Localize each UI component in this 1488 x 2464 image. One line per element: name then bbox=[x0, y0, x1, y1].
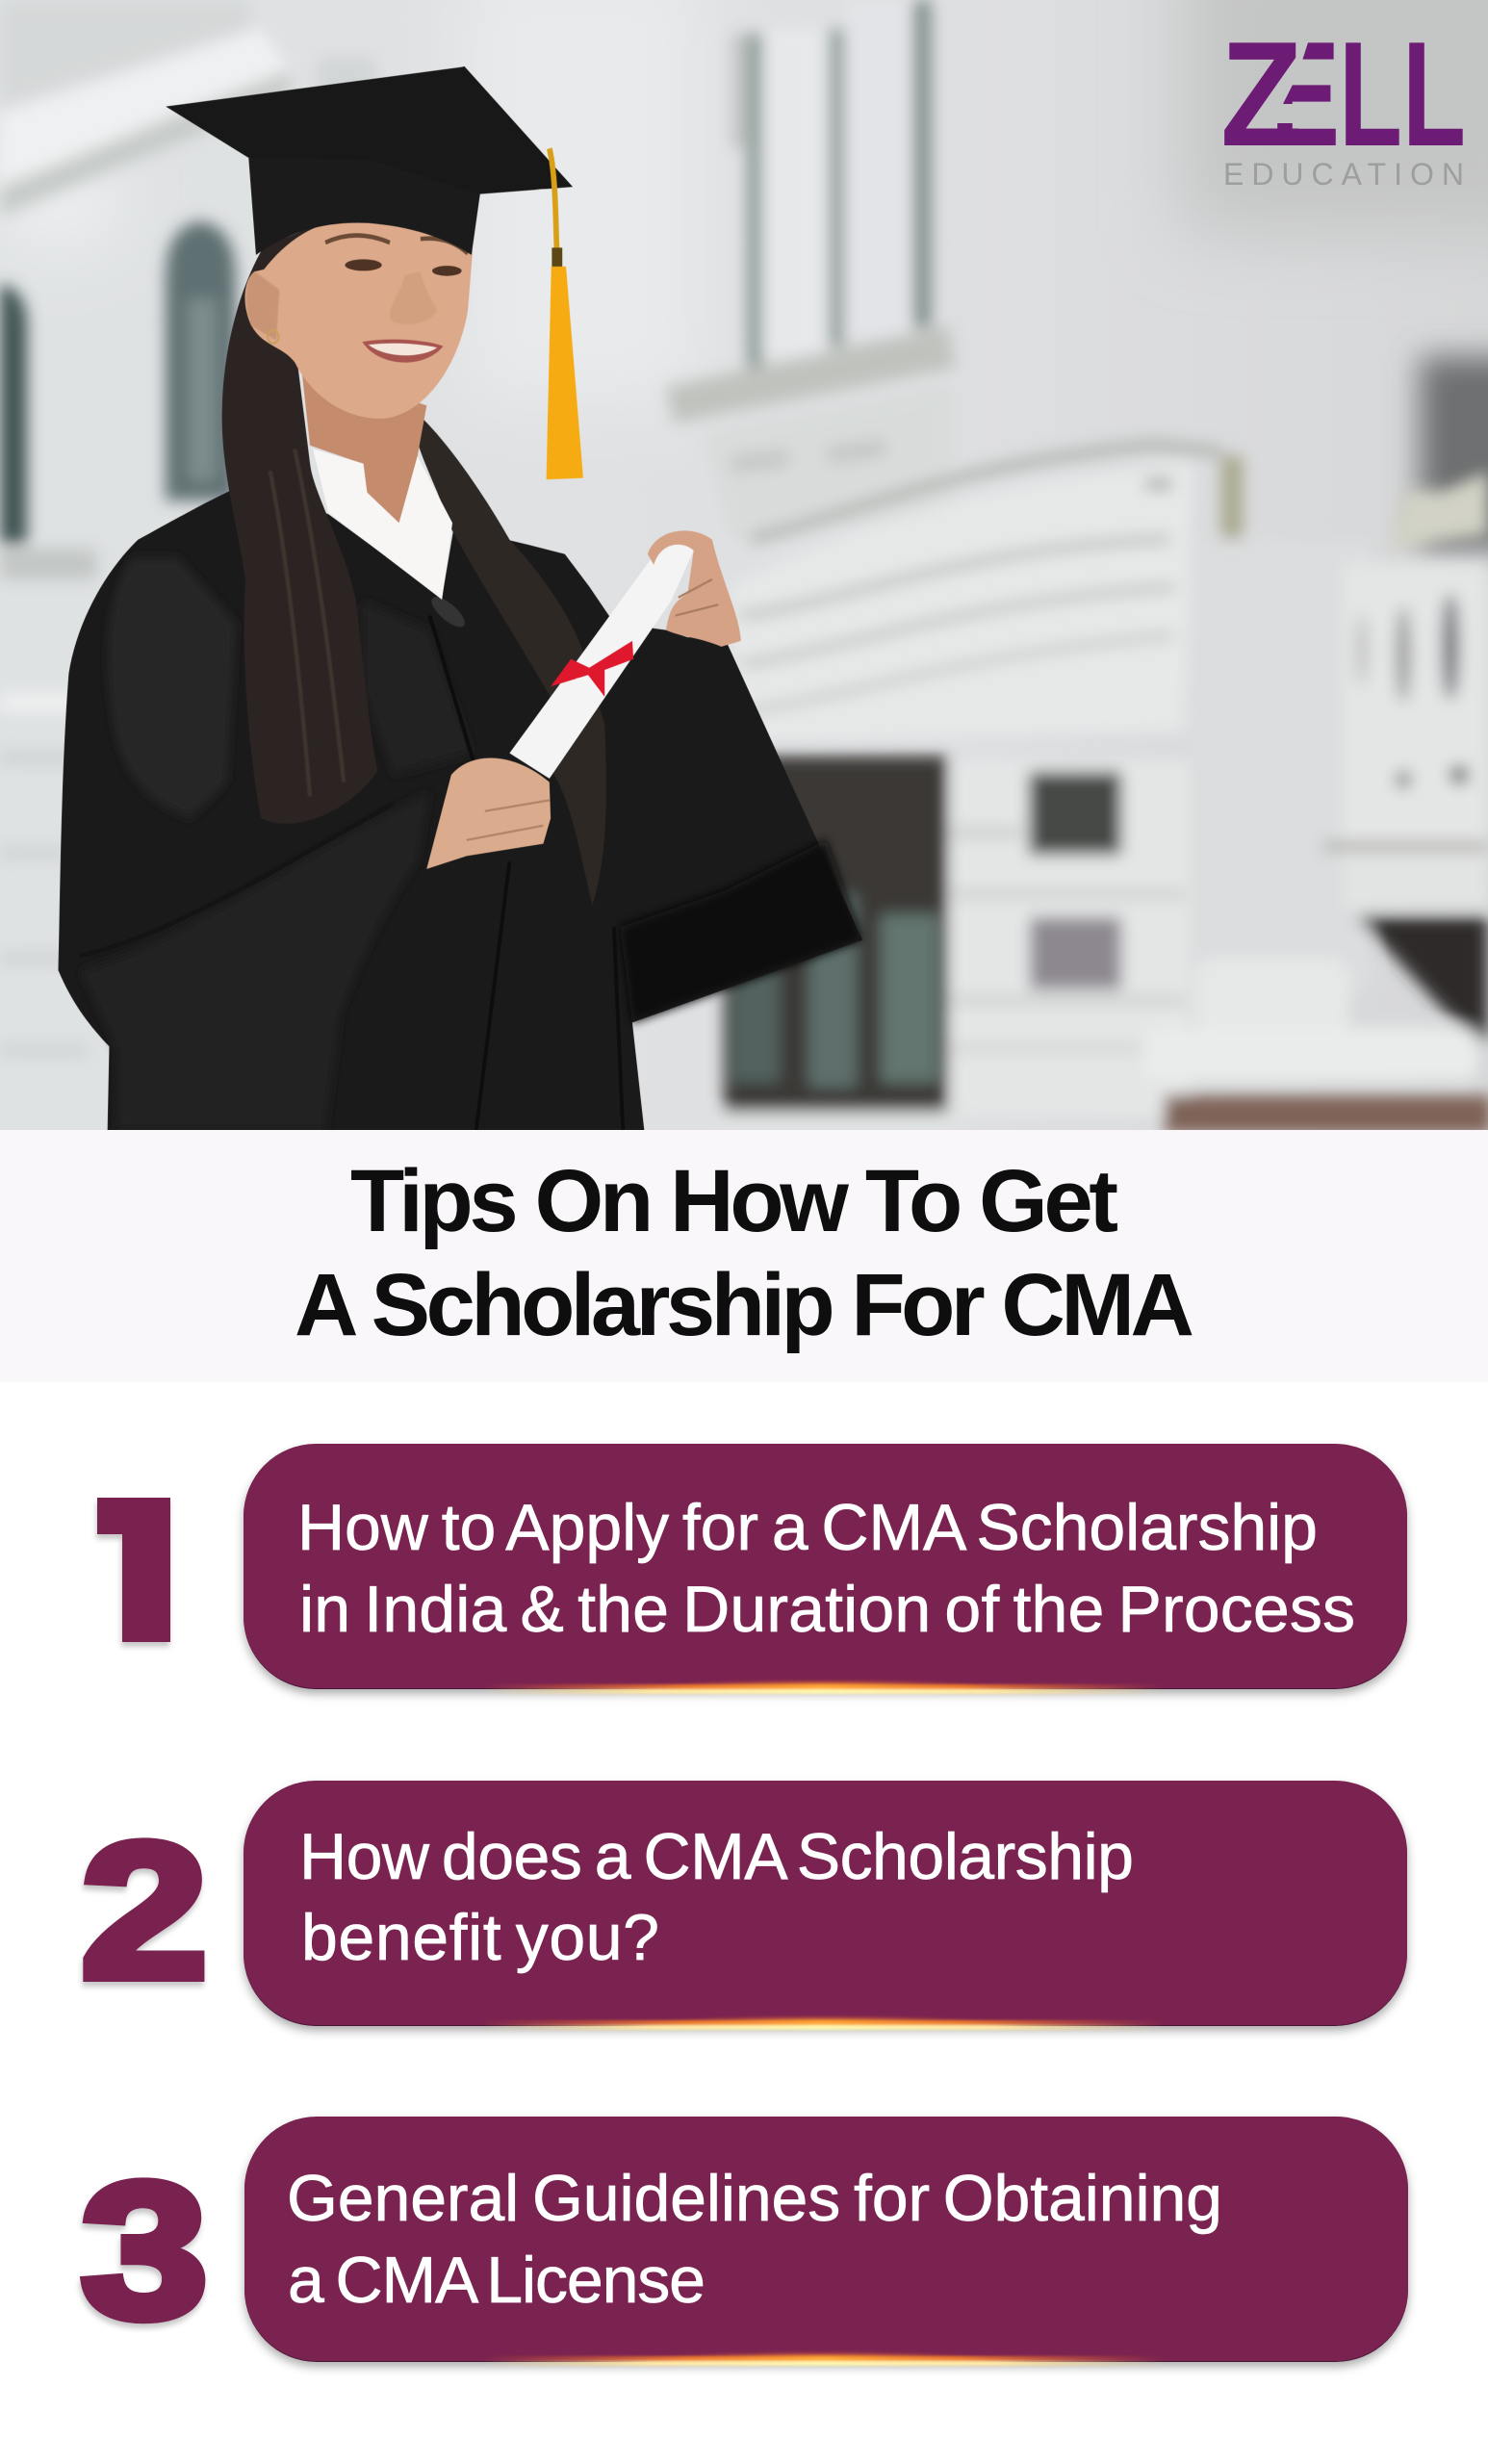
panel: step 1 bbox=[244, 1444, 1407, 1694]
panel: step 3 bbox=[244, 2117, 1408, 2366]
gown bbox=[59, 484, 862, 1134]
glow bbox=[481, 1680, 1165, 1694]
logo wordmark: L bbox=[1339, 11, 1402, 177]
large dark window bbox=[724, 756, 947, 1116]
wavy cornices bbox=[731, 462, 1193, 741]
balcony bbox=[1391, 472, 1488, 549]
lower hand bbox=[426, 757, 551, 869]
diploma scroll bbox=[509, 540, 694, 779]
mortarboard cap bbox=[166, 66, 573, 255]
step 3 text bbox=[287, 2162, 1222, 2317]
logo: Zell Education bbox=[1220, 11, 1466, 192]
white collar bbox=[313, 449, 452, 600]
title heading: Tips On How To Get bbox=[350, 1152, 1118, 1250]
dark recess right bbox=[1420, 356, 1488, 549]
glow bbox=[481, 2351, 1165, 2366]
logo wordmark: Z bbox=[1220, 11, 1302, 177]
left hair bbox=[222, 224, 377, 824]
upper windows bbox=[765, 29, 823, 356]
step 3 text: a CMA License bbox=[288, 2244, 706, 2317]
glow bbox=[481, 2015, 1165, 2030]
arched windows bbox=[166, 221, 236, 500]
upper hand bbox=[648, 530, 741, 647]
small dark windows bbox=[1029, 772, 1121, 855]
logo wordmark bbox=[1220, 11, 1466, 177]
title band bbox=[0, 1130, 1488, 1382]
number 3: 3 bbox=[81, 2143, 208, 2358]
number 1: 1 bbox=[77, 1453, 193, 1687]
lower facade stripes bbox=[953, 760, 1189, 1116]
left facade bands bbox=[2, 31, 283, 173]
step 1 text bbox=[297, 1491, 1355, 1646]
title heading bbox=[295, 1152, 1194, 1354]
step 2 text: How does a CMA Scholarship bbox=[299, 1820, 1134, 1893]
central column bbox=[1189, 539, 1372, 991]
step 1 text: How to Apply for a CMA Scholarship bbox=[297, 1491, 1318, 1564]
graduate figure bbox=[59, 66, 862, 1134]
title heading: A Scholarship For CMA bbox=[295, 1256, 1194, 1354]
face bbox=[245, 221, 473, 419]
logo wordmark: E bbox=[1270, 11, 1340, 177]
photo: graduate in front of building bbox=[0, 0, 1488, 1134]
column base bbox=[1196, 962, 1349, 1028]
logo tagline: EDUCATION bbox=[1223, 157, 1464, 192]
neck bbox=[302, 375, 427, 524]
step 3 text: General Guidelines for Obtaining bbox=[287, 2162, 1222, 2235]
tassel bbox=[547, 148, 583, 479]
blurred building background bbox=[0, 0, 1488, 1134]
number 2: 2 bbox=[81, 1804, 208, 2018]
right hair bbox=[418, 417, 606, 905]
step 2 text bbox=[299, 1820, 1134, 1974]
step 2 text: benefit you? bbox=[301, 1901, 659, 1974]
step 1 text: in India & the Duration of the Process bbox=[299, 1573, 1355, 1646]
panel: step 2 bbox=[244, 1781, 1407, 2030]
